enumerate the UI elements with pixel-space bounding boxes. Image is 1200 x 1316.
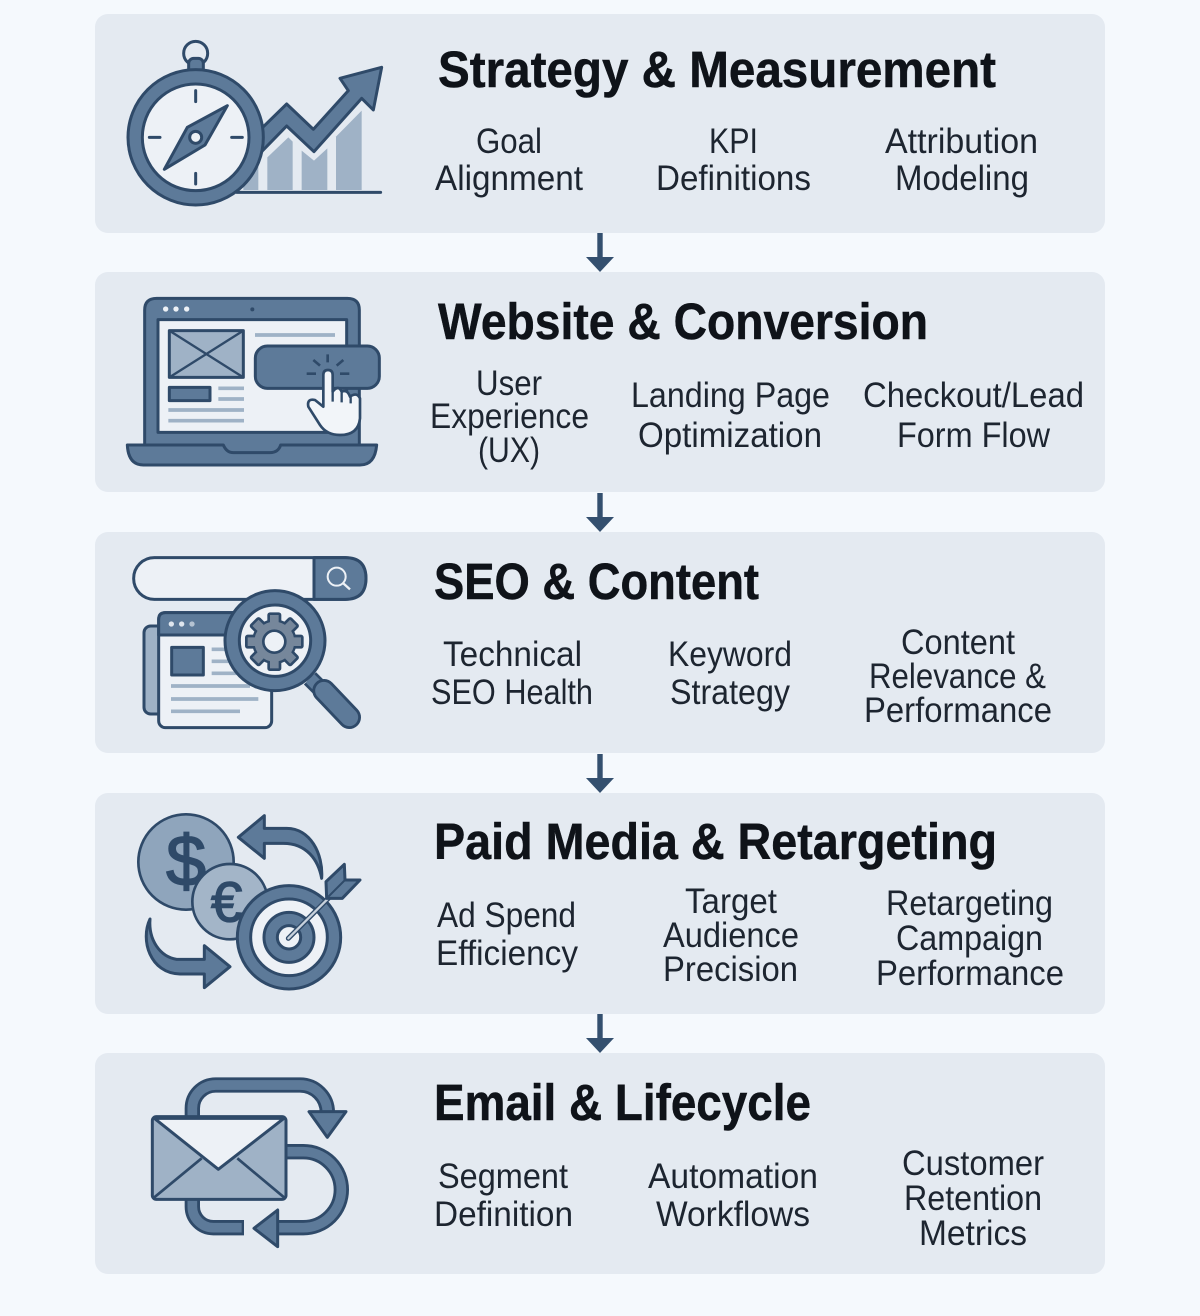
item: Ad Spend Efficiency: Efficiency xyxy=(436,934,578,973)
item: Ad Spend Efficiency: Ad Spend xyxy=(437,896,576,935)
item: Goal Alignment xyxy=(435,122,583,198)
item: Goal Alignment: Alignment xyxy=(435,159,583,198)
item: Attribution Modeling: Attribution xyxy=(885,122,1038,161)
icon: coins, target and dart: € xyxy=(211,872,242,935)
item: Segment Definition: Definition xyxy=(434,1195,573,1234)
item: Content Relevance & Performance: Content xyxy=(901,623,1015,662)
panel: Strategy & Measurement xyxy=(95,14,1105,233)
item: Customer Retention Metrics: Retention xyxy=(904,1179,1042,1218)
item: Target Audience Precision: Audience xyxy=(663,916,799,955)
arrow: step 1 to 2 xyxy=(586,233,614,272)
heading: SEO & Content: SEO & Content xyxy=(434,553,759,610)
item: Landing Page Optimization: Landing Page xyxy=(631,376,830,415)
item: Landing Page Optimization: Optimization xyxy=(638,416,822,455)
arrow: step 4 to 5 xyxy=(586,1014,614,1053)
item: Retargeting Campaign Performance xyxy=(876,884,1064,993)
heading: Email & Lifecycle: Email & Lifecycle xyxy=(434,1074,811,1131)
item: User Experience (UX): User xyxy=(476,364,542,403)
item: KPI Definitions: KPI xyxy=(709,122,758,161)
item: KPI Definitions xyxy=(656,122,811,198)
item: Checkout/Lead Form Flow: Form Flow xyxy=(897,416,1051,455)
item: User Experience (UX): Experience xyxy=(430,397,589,436)
icon: compass and growth chart xyxy=(128,41,382,205)
item: Automation Workflows xyxy=(648,1157,818,1234)
item: Keyword Strategy: Strategy xyxy=(670,673,790,712)
arrow: step 2 to 3 xyxy=(586,493,614,532)
icon: search bar, page and magnifier xyxy=(134,558,366,728)
item: Keyword Strategy: Keyword xyxy=(668,635,792,674)
item: User Experience (UX) xyxy=(430,364,589,470)
heading: Website & Conversion: Website & Conversion xyxy=(438,293,928,350)
icon: coins, target and dart xyxy=(138,814,360,989)
item: Content Relevance & Performance: Performance xyxy=(864,691,1052,730)
item: Keyword Strategy xyxy=(668,635,792,712)
item: Customer Retention Metrics: Customer xyxy=(902,1144,1044,1183)
item: Retargeting Campaign Performance: Performance xyxy=(876,954,1064,993)
item: Content Relevance & Performance: Relevance & xyxy=(869,657,1046,696)
item: Landing Page Optimization xyxy=(631,376,830,455)
item: Checkout/Lead Form Flow: Checkout/Lead xyxy=(863,376,1084,415)
item: Target Audience Precision xyxy=(663,882,799,989)
item: Automation Workflows: Automation xyxy=(648,1157,818,1196)
item: Retargeting Campaign Performance: Retargeting xyxy=(886,884,1053,923)
item: Technical SEO Health: Technical xyxy=(443,635,582,674)
icon: coins, target and dart: $ xyxy=(166,821,206,901)
item: Checkout/Lead Form Flow xyxy=(863,376,1084,455)
item: Target Audience Precision: Precision xyxy=(663,950,798,989)
item: Goal Alignment: Goal xyxy=(476,122,542,161)
item: Target Audience Precision: Target xyxy=(685,882,777,921)
icon: envelope with loop arrows xyxy=(152,1085,346,1247)
item: Retargeting Campaign Performance: Campaign xyxy=(896,919,1043,958)
panel: SEO & Content xyxy=(95,532,1105,753)
item: Attribution Modeling xyxy=(885,122,1038,198)
item: Customer Retention Metrics xyxy=(902,1144,1044,1253)
item: Ad Spend Efficiency xyxy=(436,896,578,973)
item: Segment Definition xyxy=(434,1157,573,1234)
item: Technical SEO Health xyxy=(431,635,593,712)
heading: Strategy & Measurement: Strategy & Measurement xyxy=(438,41,996,98)
panel: Email & Lifecycle xyxy=(95,1053,1105,1274)
item: Content Relevance & Performance xyxy=(864,623,1052,730)
item: KPI Definitions: Definitions xyxy=(656,159,811,198)
item: Customer Retention Metrics: Metrics xyxy=(919,1214,1027,1253)
icon: laptop with click button xyxy=(127,298,379,465)
panel: Paid Media & Retargeting xyxy=(95,793,1105,1014)
item: Technical SEO Health: SEO Health xyxy=(431,673,593,712)
panel: Website & Conversion xyxy=(95,272,1105,492)
item: Segment Definition: Segment xyxy=(438,1157,568,1196)
heading: Paid Media & Retargeting: Paid Media & Retargeting xyxy=(434,813,997,870)
item: Automation Workflows: Workflows xyxy=(656,1195,810,1234)
item: Attribution Modeling: Modeling xyxy=(895,159,1029,198)
arrow: step 3 to 4 xyxy=(586,754,614,793)
item: User Experience (UX): (UX) xyxy=(478,431,540,470)
